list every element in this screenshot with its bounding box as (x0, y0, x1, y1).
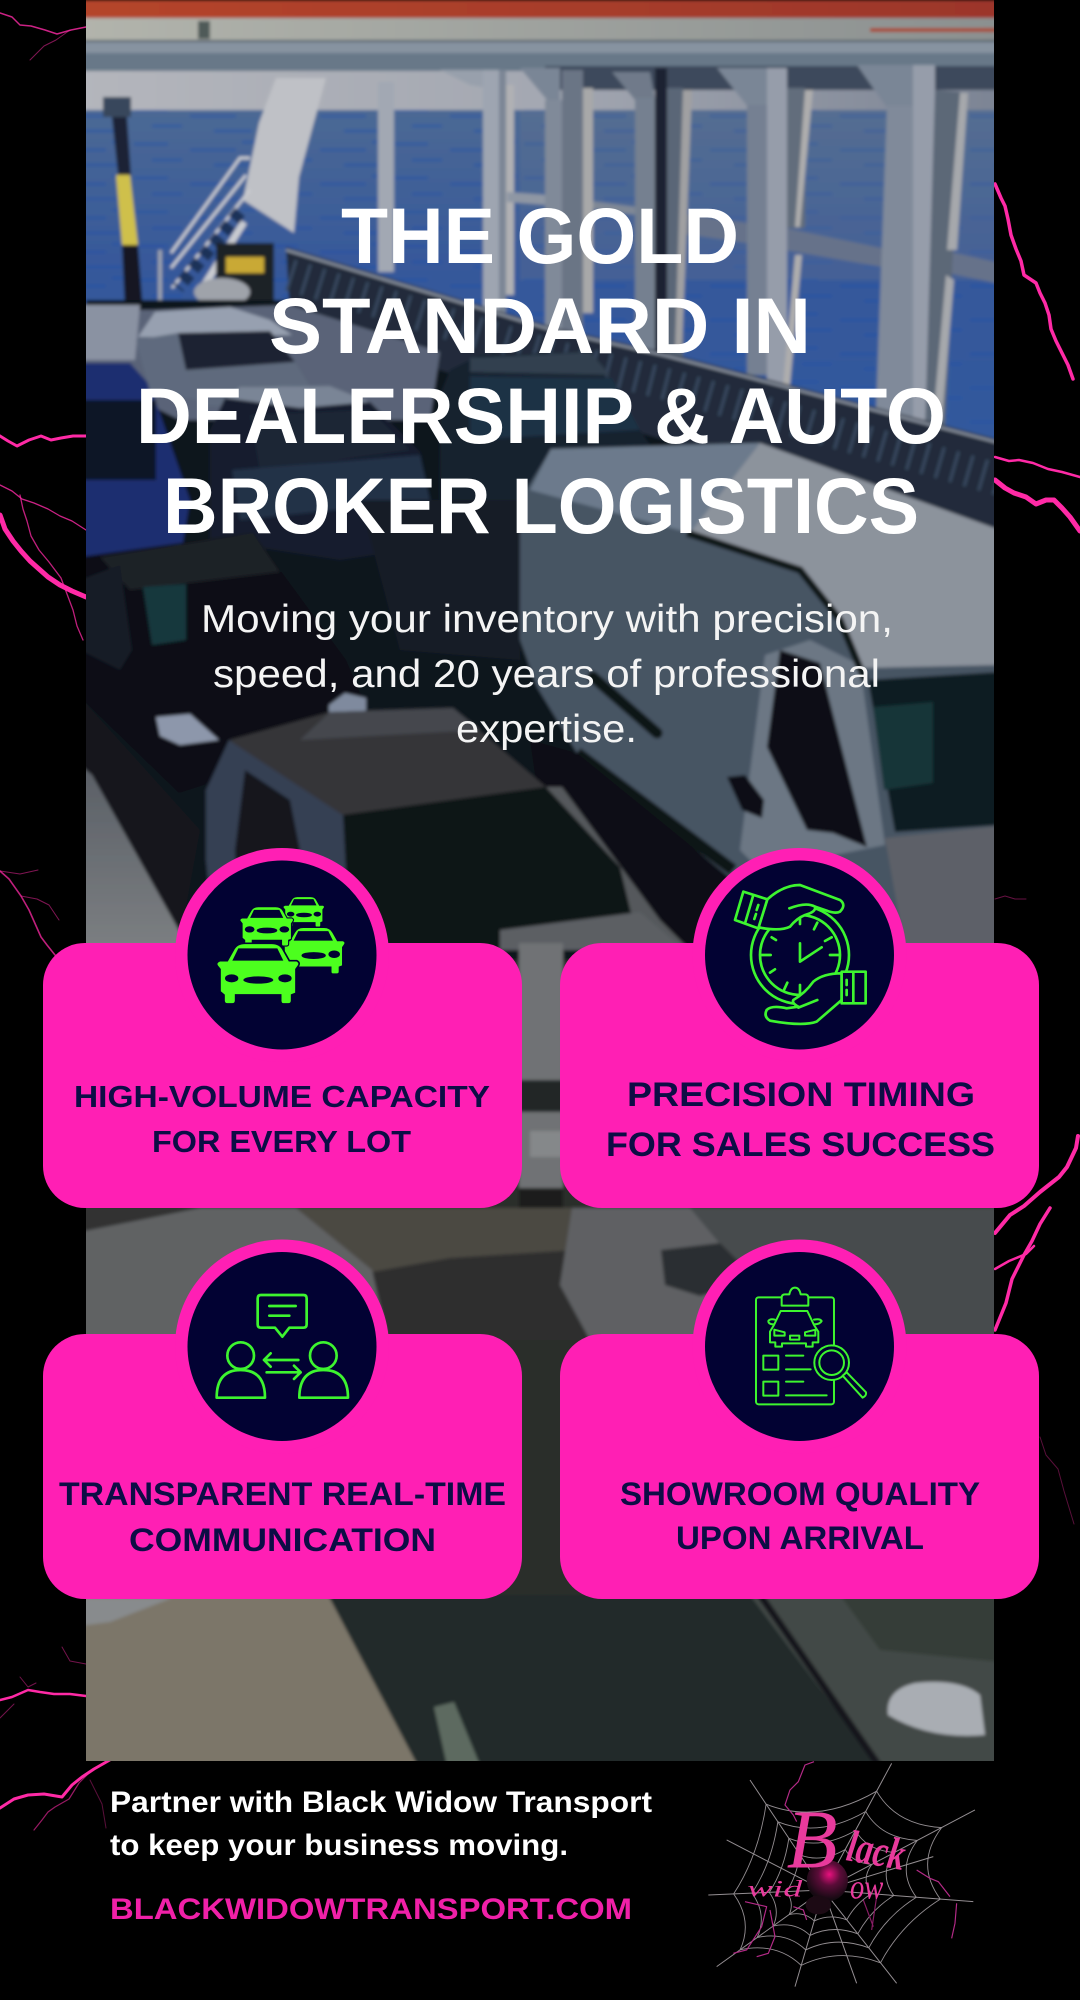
title: BROKER LOGISTICS (163, 461, 919, 550)
card label (606, 1076, 995, 1164)
title: STANDARD IN (269, 281, 811, 370)
logo: spider web with Black Widow lettering: B (787, 1794, 838, 1886)
icon: clock in two hands (735, 885, 866, 1024)
card label: PRECISION TIMING (627, 1076, 975, 1114)
footer call to action: Partner with Black Widow Transport (110, 1786, 652, 1819)
logo: spider web with Black Widow lettering: wid (747, 1877, 803, 1903)
title: THE GOLD (341, 191, 739, 280)
panel: real-time communication card (43, 1240, 522, 1599)
subtitle: Moving your inventory with precision, (201, 598, 893, 641)
icon: inspection clipboard (756, 1288, 866, 1404)
footer call to action: to keep your business moving. (110, 1829, 568, 1862)
icon: two people exchanging messages (217, 1295, 348, 1398)
logo: spider web with Black Widow lettering: lack (843, 1821, 910, 1880)
card label: FOR EVERY LOT (152, 1124, 411, 1159)
card label: SHOWROOM QUALITY (620, 1476, 980, 1512)
panel: high-volume capacity card (43, 848, 522, 1208)
website link: BLACKWIDOWTRANSPORT.COM (110, 1893, 632, 1926)
subtitle: speed, and 20 years of professional (213, 653, 880, 696)
title: DEALERSHIP & AUTO (136, 371, 946, 460)
logo: spider web with Black Widow lettering: ow (850, 1867, 884, 1906)
footer call to action (110, 1786, 652, 1862)
card label (620, 1476, 980, 1556)
panel: precision timing card (560, 848, 1039, 1208)
card label (59, 1476, 506, 1558)
icon: cars in traffic (217, 897, 345, 1004)
card label: TRANSPARENT REAL-TIME (59, 1476, 506, 1512)
card label: UPON ARRIVAL (676, 1520, 924, 1556)
card label: HIGH-VOLUME CAPACITY (74, 1079, 490, 1114)
subtitle (201, 598, 893, 751)
card label (74, 1079, 490, 1159)
panel: ferry deck photo (80, 0, 1000, 1770)
panel: showroom quality card (560, 1240, 1039, 1599)
card label: FOR SALES SUCCESS (606, 1126, 995, 1164)
logo: spider web with Black Widow lettering (708, 1762, 975, 1987)
title (136, 191, 946, 550)
subtitle: expertise. (456, 708, 637, 751)
card label: COMMUNICATION (129, 1522, 436, 1558)
